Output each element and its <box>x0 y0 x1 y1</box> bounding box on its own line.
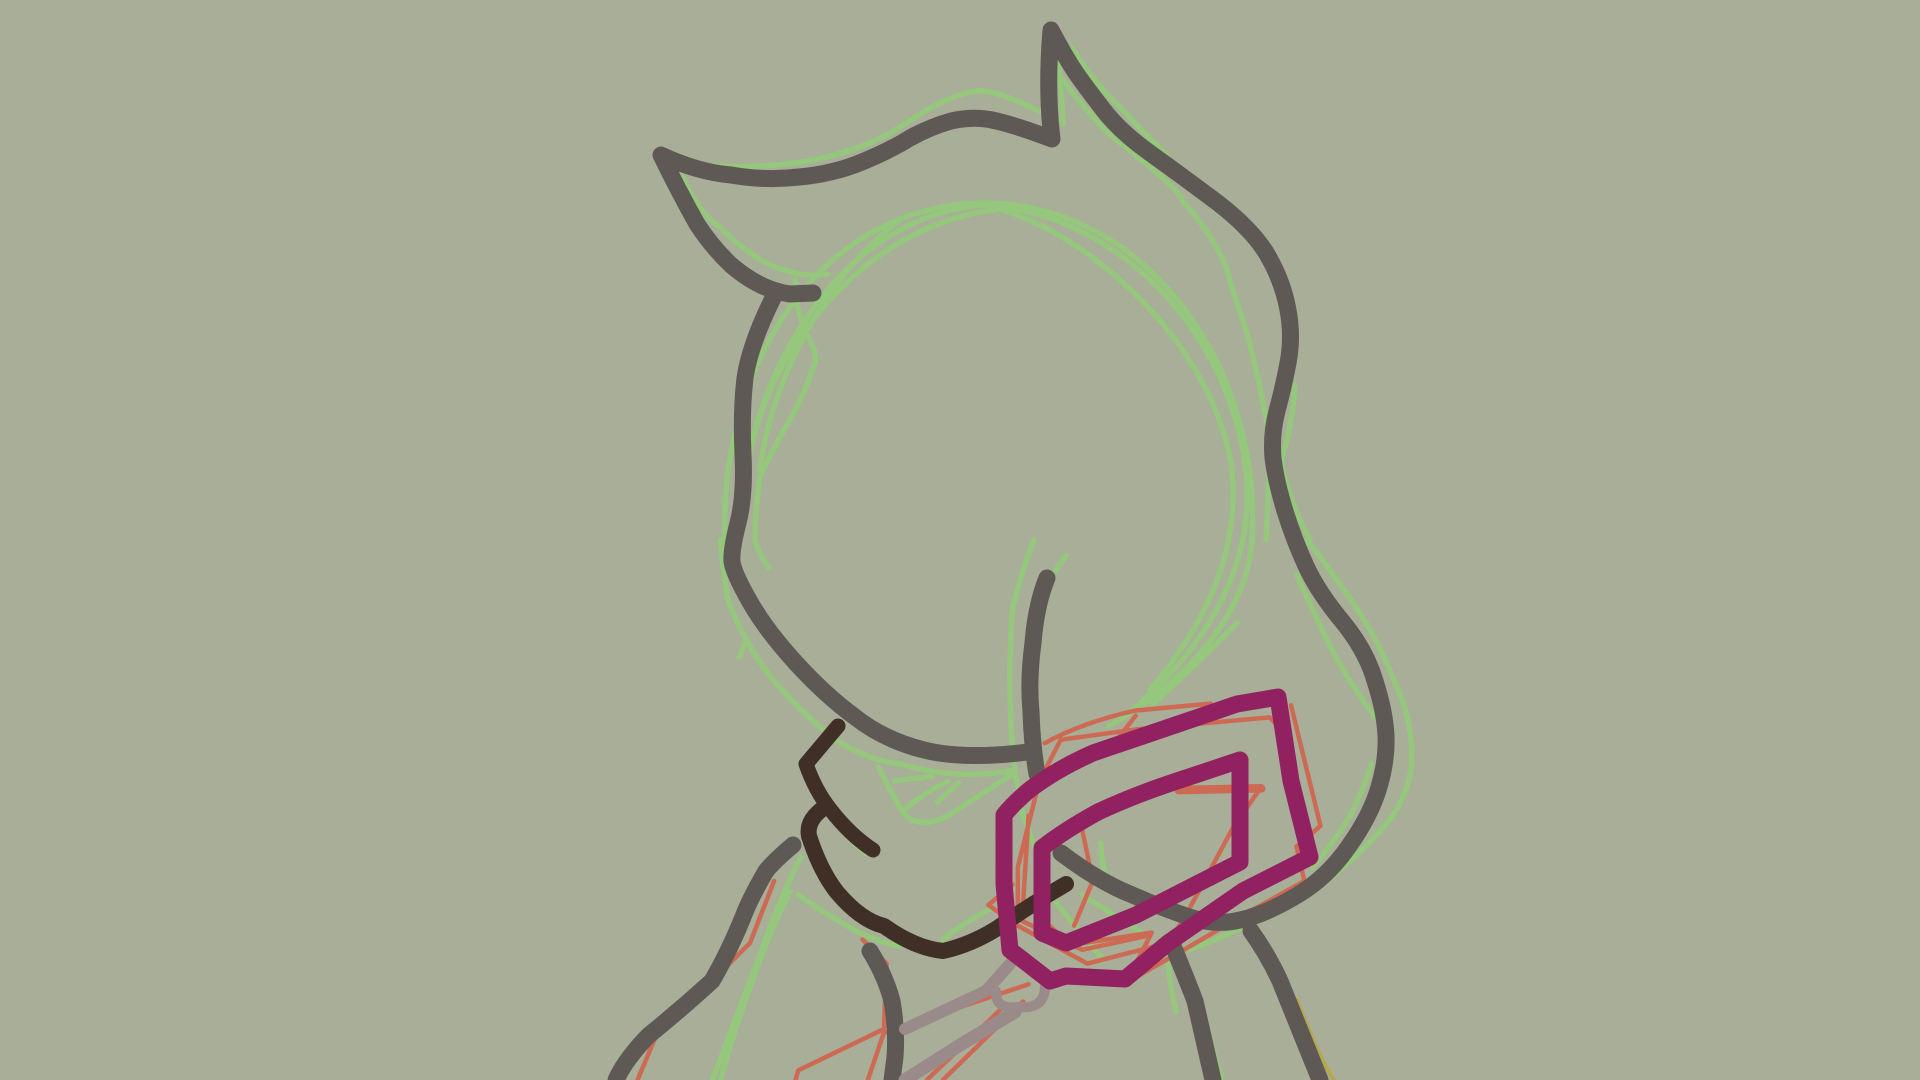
green construction lines: head and hair <box>682 48 1310 726</box>
dark brown collar <box>806 726 1066 951</box>
green construction lines: neck, jaw and body <box>712 540 1412 1080</box>
red sketch lines around the pendant <box>637 704 1321 1080</box>
magenta pendant outline <box>1004 697 1310 981</box>
grey outline: hair and face <box>616 30 1386 1080</box>
leash and ring <box>905 964 1045 1080</box>
yellow sketch line <box>1256 950 1334 1080</box>
